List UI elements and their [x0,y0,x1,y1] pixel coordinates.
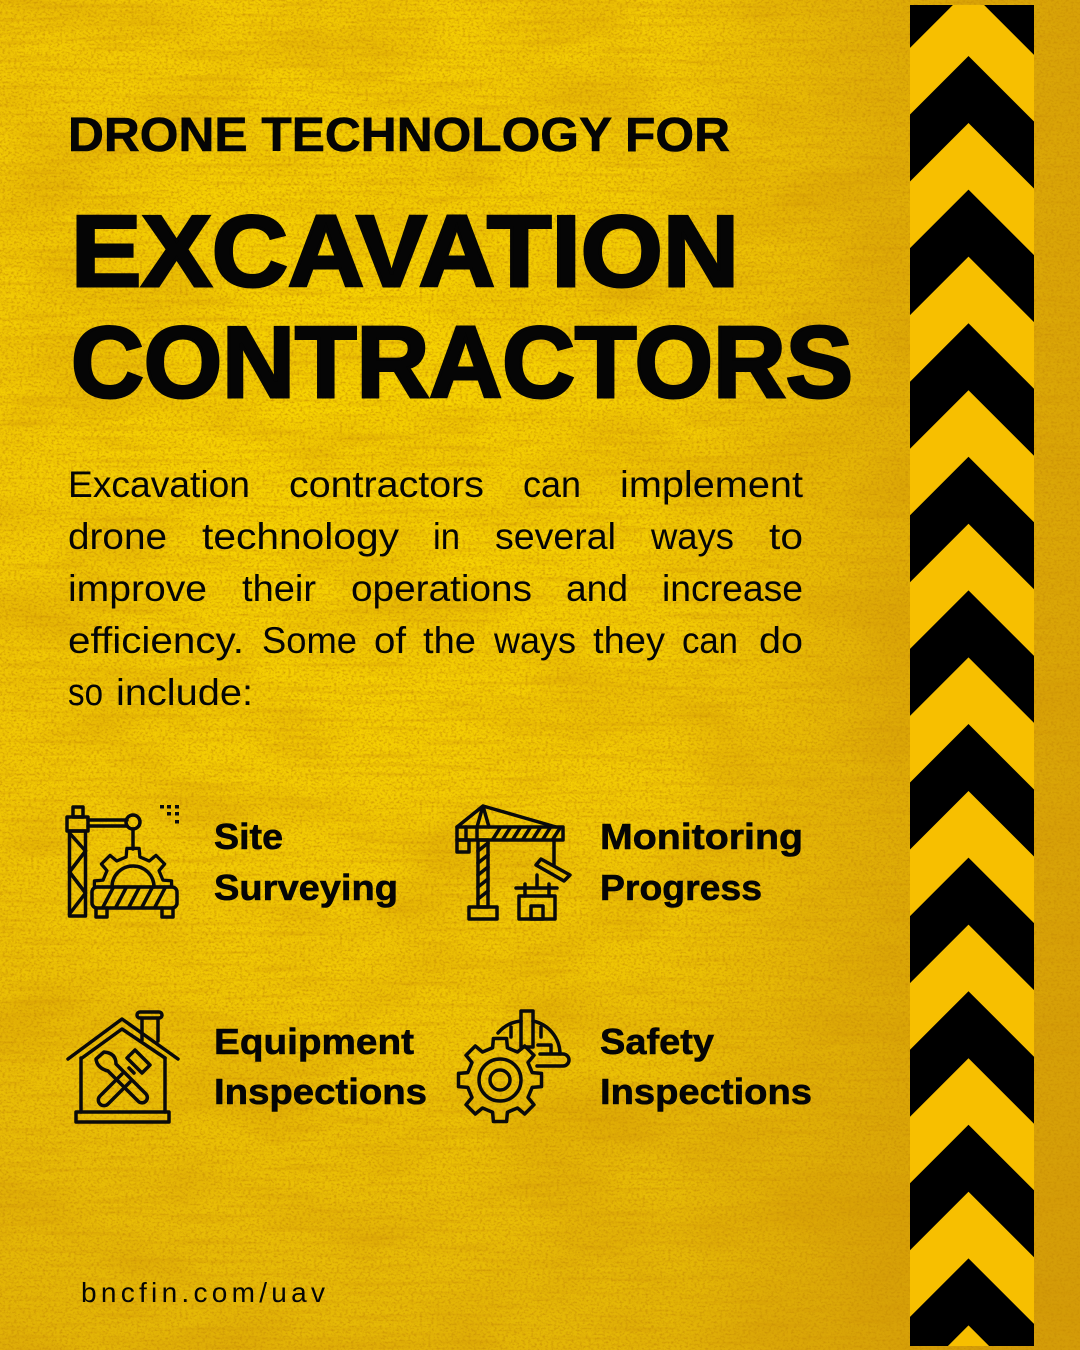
intro paragraph: their [242,568,316,609]
intro paragraph: increase [662,568,803,609]
intro paragraph: drone [68,516,167,557]
label: safety inspections: Inspections [600,1071,812,1112]
intro paragraph: improve [68,568,207,609]
label: safety inspections: Safety [600,1021,714,1062]
label: site surveying: Surveying [214,867,398,908]
title: large heading: CONTRACTORS [71,307,853,419]
title: large heading [71,196,853,419]
intro paragraph: and [566,568,628,609]
intro paragraph: contractors [289,464,484,505]
intro paragraph: the [423,620,476,661]
intro paragraph: implement [620,464,804,505]
title: large heading: EXCAVATION [71,196,739,308]
label: monitoring progress [600,816,803,908]
intro paragraph: Some [262,620,357,661]
intro paragraph: so [68,672,103,714]
label: monitoring progress: Monitoring [600,816,803,857]
hazard chevron strip [910,0,1034,1350]
intro paragraph: operations [351,568,532,609]
intro paragraph: technology [202,516,400,557]
intro paragraph: efficiency. [68,620,244,661]
intro paragraph: Excavation [68,464,250,505]
intro paragraph: to [769,516,803,557]
icon: tower crane and building [457,806,570,919]
label: site surveying: Site [214,816,283,857]
intro paragraph: in [433,516,460,557]
label: safety inspections [600,1021,812,1112]
icon: gear with hard hat [458,1011,569,1122]
label: equipment inspections: Equipment [214,1021,414,1062]
icon: crane with gear and barrier [67,805,179,917]
icon: house with tools [68,1012,178,1122]
label: equipment inspections: Inspections [214,1071,427,1112]
intro paragraph: do [759,620,803,661]
label: monitoring progress: Progress [600,867,762,908]
label: equipment inspections [214,1021,427,1112]
intro paragraph: ways [493,620,576,661]
intro paragraph: ways [650,516,734,557]
footer url: bncfin.com/uav [81,1277,325,1308]
label: site surveying [214,816,398,908]
intro paragraph: can [682,620,738,661]
intro paragraph: they [593,620,666,661]
intro paragraph [68,464,804,714]
intro paragraph: include: [116,672,253,713]
intro paragraph: can [523,464,581,505]
title: small heading: DRONE TECHNOLOGY FOR [68,109,730,162]
intro paragraph: of [374,620,407,661]
intro paragraph: several [495,516,616,557]
